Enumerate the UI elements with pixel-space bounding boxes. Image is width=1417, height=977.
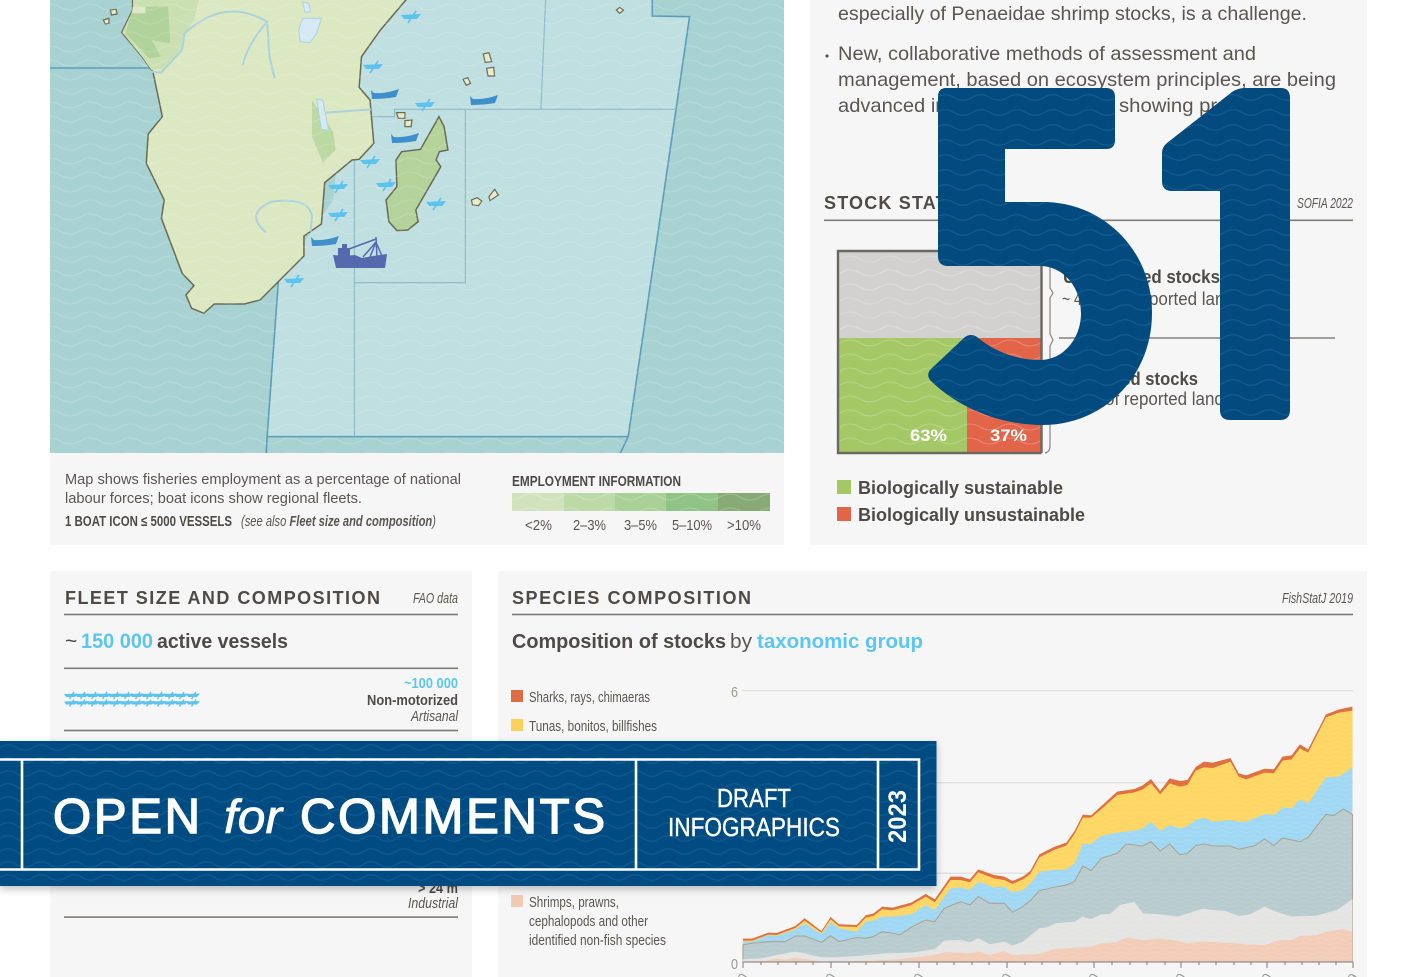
heading: stock status: SOFIA 2022 bbox=[1297, 196, 1353, 212]
employment legend: 2–3% bbox=[573, 518, 606, 534]
panel: species composition bbox=[498, 571, 1367, 977]
stock status chart: 37% bbox=[990, 426, 1027, 445]
x axis bbox=[722, 962, 1362, 977]
panel: map bbox=[50, 0, 784, 453]
banner title bbox=[53, 790, 605, 844]
stock labels: ~ 40% bbox=[1062, 289, 1102, 309]
active vessels label: active vessels bbox=[157, 631, 288, 653]
bullet text: advanced in some regions and bbox=[838, 95, 1112, 117]
banner subtitle: INFOGRAPHICS bbox=[668, 812, 840, 842]
caption text: Map shows fisheries employment as a percentage of national bbox=[65, 471, 461, 488]
legend: taxonomic groups: cephalopods and other bbox=[529, 914, 648, 930]
employment legend: 3–5% bbox=[624, 518, 657, 534]
icons: small fishing boats bbox=[284, 11, 498, 287]
legend: sustainability: Biologically unsustainable bbox=[858, 504, 1085, 525]
row: industrial: > 24 m bbox=[418, 880, 458, 897]
mainland africa bbox=[103, 0, 623, 313]
chart subtitle: Composition of stocks bbox=[512, 631, 726, 653]
heading: stock status: STOCK STATUS bbox=[824, 193, 974, 213]
banner title: for bbox=[224, 790, 284, 843]
stacked area chart bbox=[722, 684, 1362, 977]
caption text: labour forces; boat icons show regional fleets. bbox=[65, 490, 362, 507]
banner title: OPEN bbox=[53, 790, 200, 844]
legend: taxonomic groups: identified non-fish species bbox=[529, 933, 666, 949]
caption text: 1 BOAT ICON ≤ 5000 VESSELS bbox=[65, 514, 232, 530]
employment legend: 5–10% bbox=[672, 518, 712, 534]
banner: open for comments bbox=[0, 741, 936, 886]
chart subtitle: taxonomic group bbox=[757, 631, 923, 653]
total vessels: 150 000 bbox=[81, 630, 153, 653]
heading: species: FishStatJ 2019 bbox=[1282, 591, 1353, 607]
stock labels: of reported landings bbox=[1105, 389, 1255, 409]
employment legend: <2% bbox=[525, 518, 552, 534]
heading: stock status bbox=[824, 193, 1353, 221]
caption text bbox=[65, 471, 461, 530]
stacked area chart: 6 bbox=[731, 684, 738, 701]
panel: right column bbox=[810, 0, 1367, 545]
legend: taxonomic groups: Tunas, bonitos, billfishes bbox=[529, 719, 657, 735]
panel: map caption bbox=[50, 453, 784, 545]
page number 51 bbox=[928, 88, 1290, 425]
bullet text: New, collaborative methods of assessment and bbox=[838, 43, 1256, 65]
exclusive fishing zone bbox=[50, 0, 690, 453]
legend: sustainability: Biologically sustainable bbox=[858, 477, 1063, 498]
legend: sustainability bbox=[837, 477, 1085, 525]
row: industrial: Industrial bbox=[408, 895, 459, 912]
stock labels: Unassessed stocks bbox=[1063, 267, 1220, 287]
total vessels: ~ bbox=[65, 630, 77, 653]
legend: taxonomic groups: Sharks, rays, chimaeras bbox=[529, 690, 650, 706]
banner year: 2023 bbox=[884, 790, 912, 843]
legend: taxonomic groups: Shrimps, prawns, bbox=[529, 895, 619, 911]
stock labels bbox=[1059, 267, 1335, 409]
bullet text: management, based on ecosystem principles, are being bbox=[838, 69, 1336, 91]
stacked area chart: 0 bbox=[731, 956, 738, 973]
heading: fleet bbox=[64, 588, 458, 615]
caption text: (see also Fleet size and composition) bbox=[241, 514, 436, 530]
heading: species: SPECIES COMPOSITION bbox=[512, 588, 751, 608]
banner title: COMMENTS bbox=[300, 790, 605, 844]
heading: fleet: FAO data bbox=[413, 591, 458, 607]
row: non-motorized: Artisanal bbox=[410, 708, 459, 725]
stock status chart bbox=[838, 251, 1042, 453]
icon: boat rows bbox=[64, 692, 200, 706]
stock labels: ~ 60% bbox=[1062, 389, 1102, 409]
row: motorized, under banner: 40 000 bbox=[420, 738, 458, 755]
row: industrial bbox=[64, 880, 459, 918]
stock labels: Assessed stocks bbox=[1063, 369, 1198, 389]
employment legend: EMPLOYMENT INFORMATION bbox=[512, 474, 681, 490]
bracket bbox=[1045, 251, 1053, 453]
stock labels: of reported landings bbox=[1115, 289, 1265, 309]
heading: species bbox=[512, 588, 1353, 615]
chart subtitle bbox=[512, 631, 923, 653]
bullet text bbox=[825, 3, 1336, 117]
legend: taxonomic groups bbox=[511, 690, 666, 949]
chart subtitle: by bbox=[730, 631, 752, 653]
employment legend: >10% bbox=[727, 518, 761, 534]
row: non-motorized bbox=[64, 675, 459, 731]
employment legend bbox=[512, 474, 770, 534]
stock status chart: 63% bbox=[910, 426, 947, 445]
icon: trawler bbox=[333, 237, 387, 268]
heading: fleet: FLEET SIZE AND COMPOSITION bbox=[65, 588, 380, 608]
row: non-motorized: Non-motorized bbox=[367, 692, 458, 709]
bullet text: showing promise. bbox=[1119, 95, 1277, 117]
bullet text: especially of Penaeidae shrimp stocks, is a challenge. bbox=[838, 3, 1307, 25]
banner subtitle: DRAFT bbox=[717, 783, 791, 813]
row: non-motorized: ~100 000 bbox=[404, 675, 458, 692]
panel: fleet size and composition bbox=[50, 571, 472, 977]
banner subtitle bbox=[668, 783, 840, 842]
